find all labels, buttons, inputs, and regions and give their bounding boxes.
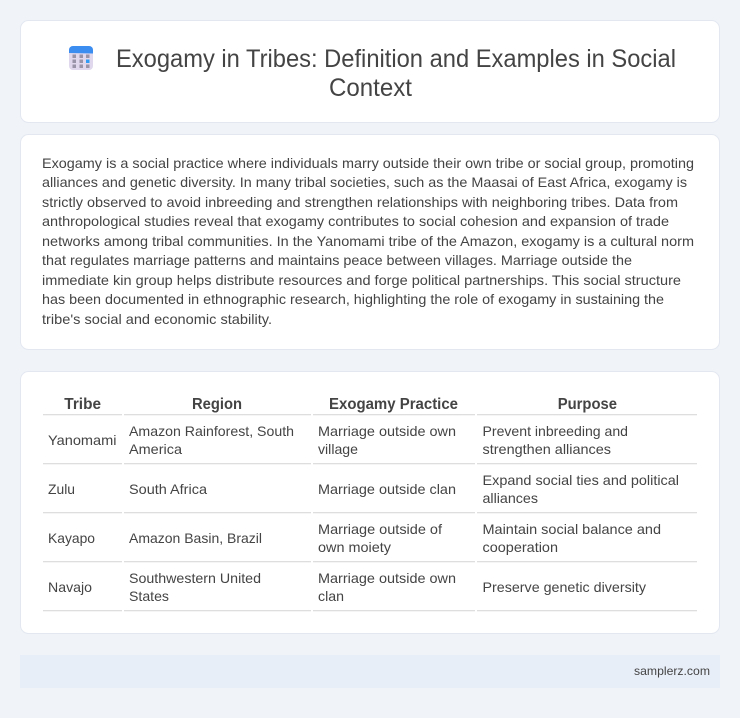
table row: Yanomami <box>48 423 628 457</box>
text block: introduction: that regulates marriage patterns and maintains peace between villages. Marriage outside the <box>42 252 632 268</box>
table row: Navajo: Navajo <box>48 579 92 595</box>
title: Context <box>329 74 412 102</box>
table row: Kayapo: own moiety <box>318 539 391 555</box>
table header: Region <box>192 396 242 413</box>
table row: Yanomami: Yanomami <box>48 432 116 448</box>
text block: introduction: immediate kin group helps distribute resources and forge political partnerships. This social structure <box>42 272 681 288</box>
table row: Navajo: Southwestern United <box>129 570 261 586</box>
title: Exogamy in Tribes: Definition and Examples in Social <box>116 45 676 73</box>
table header: Purpose <box>558 396 617 413</box>
footer bar <box>20 655 720 688</box>
table row: Zulu: Marriage outside clan <box>318 481 456 497</box>
table row: Yanomami: Marriage outside own <box>318 423 456 439</box>
icon: calendar <box>69 46 93 70</box>
table row: Kayapo: Kayapo <box>48 530 95 546</box>
table row: Zulu <box>48 472 679 506</box>
table row: Yanomami: Amazon Rainforest, South <box>129 423 294 439</box>
table row: Navajo: Marriage outside own <box>318 570 456 586</box>
text block: introduction: alliances and genetic diversity. In many tribal societies, such as the Maasai of East Africa, exogamy is <box>42 174 687 190</box>
table row: Navajo <box>48 570 646 604</box>
table header: Exogamy Practice <box>329 396 458 413</box>
table header <box>64 396 617 413</box>
text block: introduction: has been documented in ethnographic research, highlighting the role of exogamy in sustaining the <box>42 291 664 307</box>
text block: introduction: networks among tribal communities. In the Yanomami tribe of the Amazon, exogamy is a cultural norm <box>42 233 694 249</box>
table row: Kayapo: Marriage outside of <box>318 521 442 537</box>
footer credit: samplerz.com <box>634 664 710 678</box>
table row: Zulu: Zulu <box>48 481 75 497</box>
panel: introduction text <box>20 134 720 350</box>
table row: Yanomami: strengthen alliances <box>482 441 611 457</box>
text block: introduction: strictly observed to avoid inbreeding and strengthen relationships with neighboring tribes. Data from <box>42 194 678 210</box>
title <box>116 45 676 102</box>
table row: Kayapo: Maintain social balance and <box>482 521 661 537</box>
table row: Yanomami: village <box>318 441 358 457</box>
table row: Navajo: Preserve genetic diversity <box>482 579 646 595</box>
table row: Zulu: South Africa <box>129 481 207 497</box>
table row: Kayapo: Amazon Basin, Brazil <box>129 530 262 546</box>
table row: Navajo: clan <box>318 588 344 604</box>
table row: Zulu: Expand social ties and political <box>482 472 679 488</box>
panel: title card <box>20 20 720 122</box>
table row: Navajo: States <box>129 588 169 604</box>
table header: Tribe <box>64 396 101 413</box>
table row: Kayapo <box>48 521 661 555</box>
table row: Yanomami: America <box>129 441 182 457</box>
table row: Yanomami: Prevent inbreeding and <box>482 423 628 439</box>
text block: introduction: tribe's social and economic stability. <box>42 311 272 327</box>
panel: table card <box>20 372 720 634</box>
text block: introduction: Exogamy is a social practice where individuals marry outside their own tribe or social group, promoting <box>42 155 694 171</box>
text block: introduction: anthropological studies reveal that exogamy contributes to social cohesion and expansion of trade <box>42 213 669 229</box>
table row: Kayapo: cooperation <box>482 539 558 555</box>
table row: Zulu: alliances <box>482 490 538 506</box>
text block: introduction <box>42 155 694 327</box>
